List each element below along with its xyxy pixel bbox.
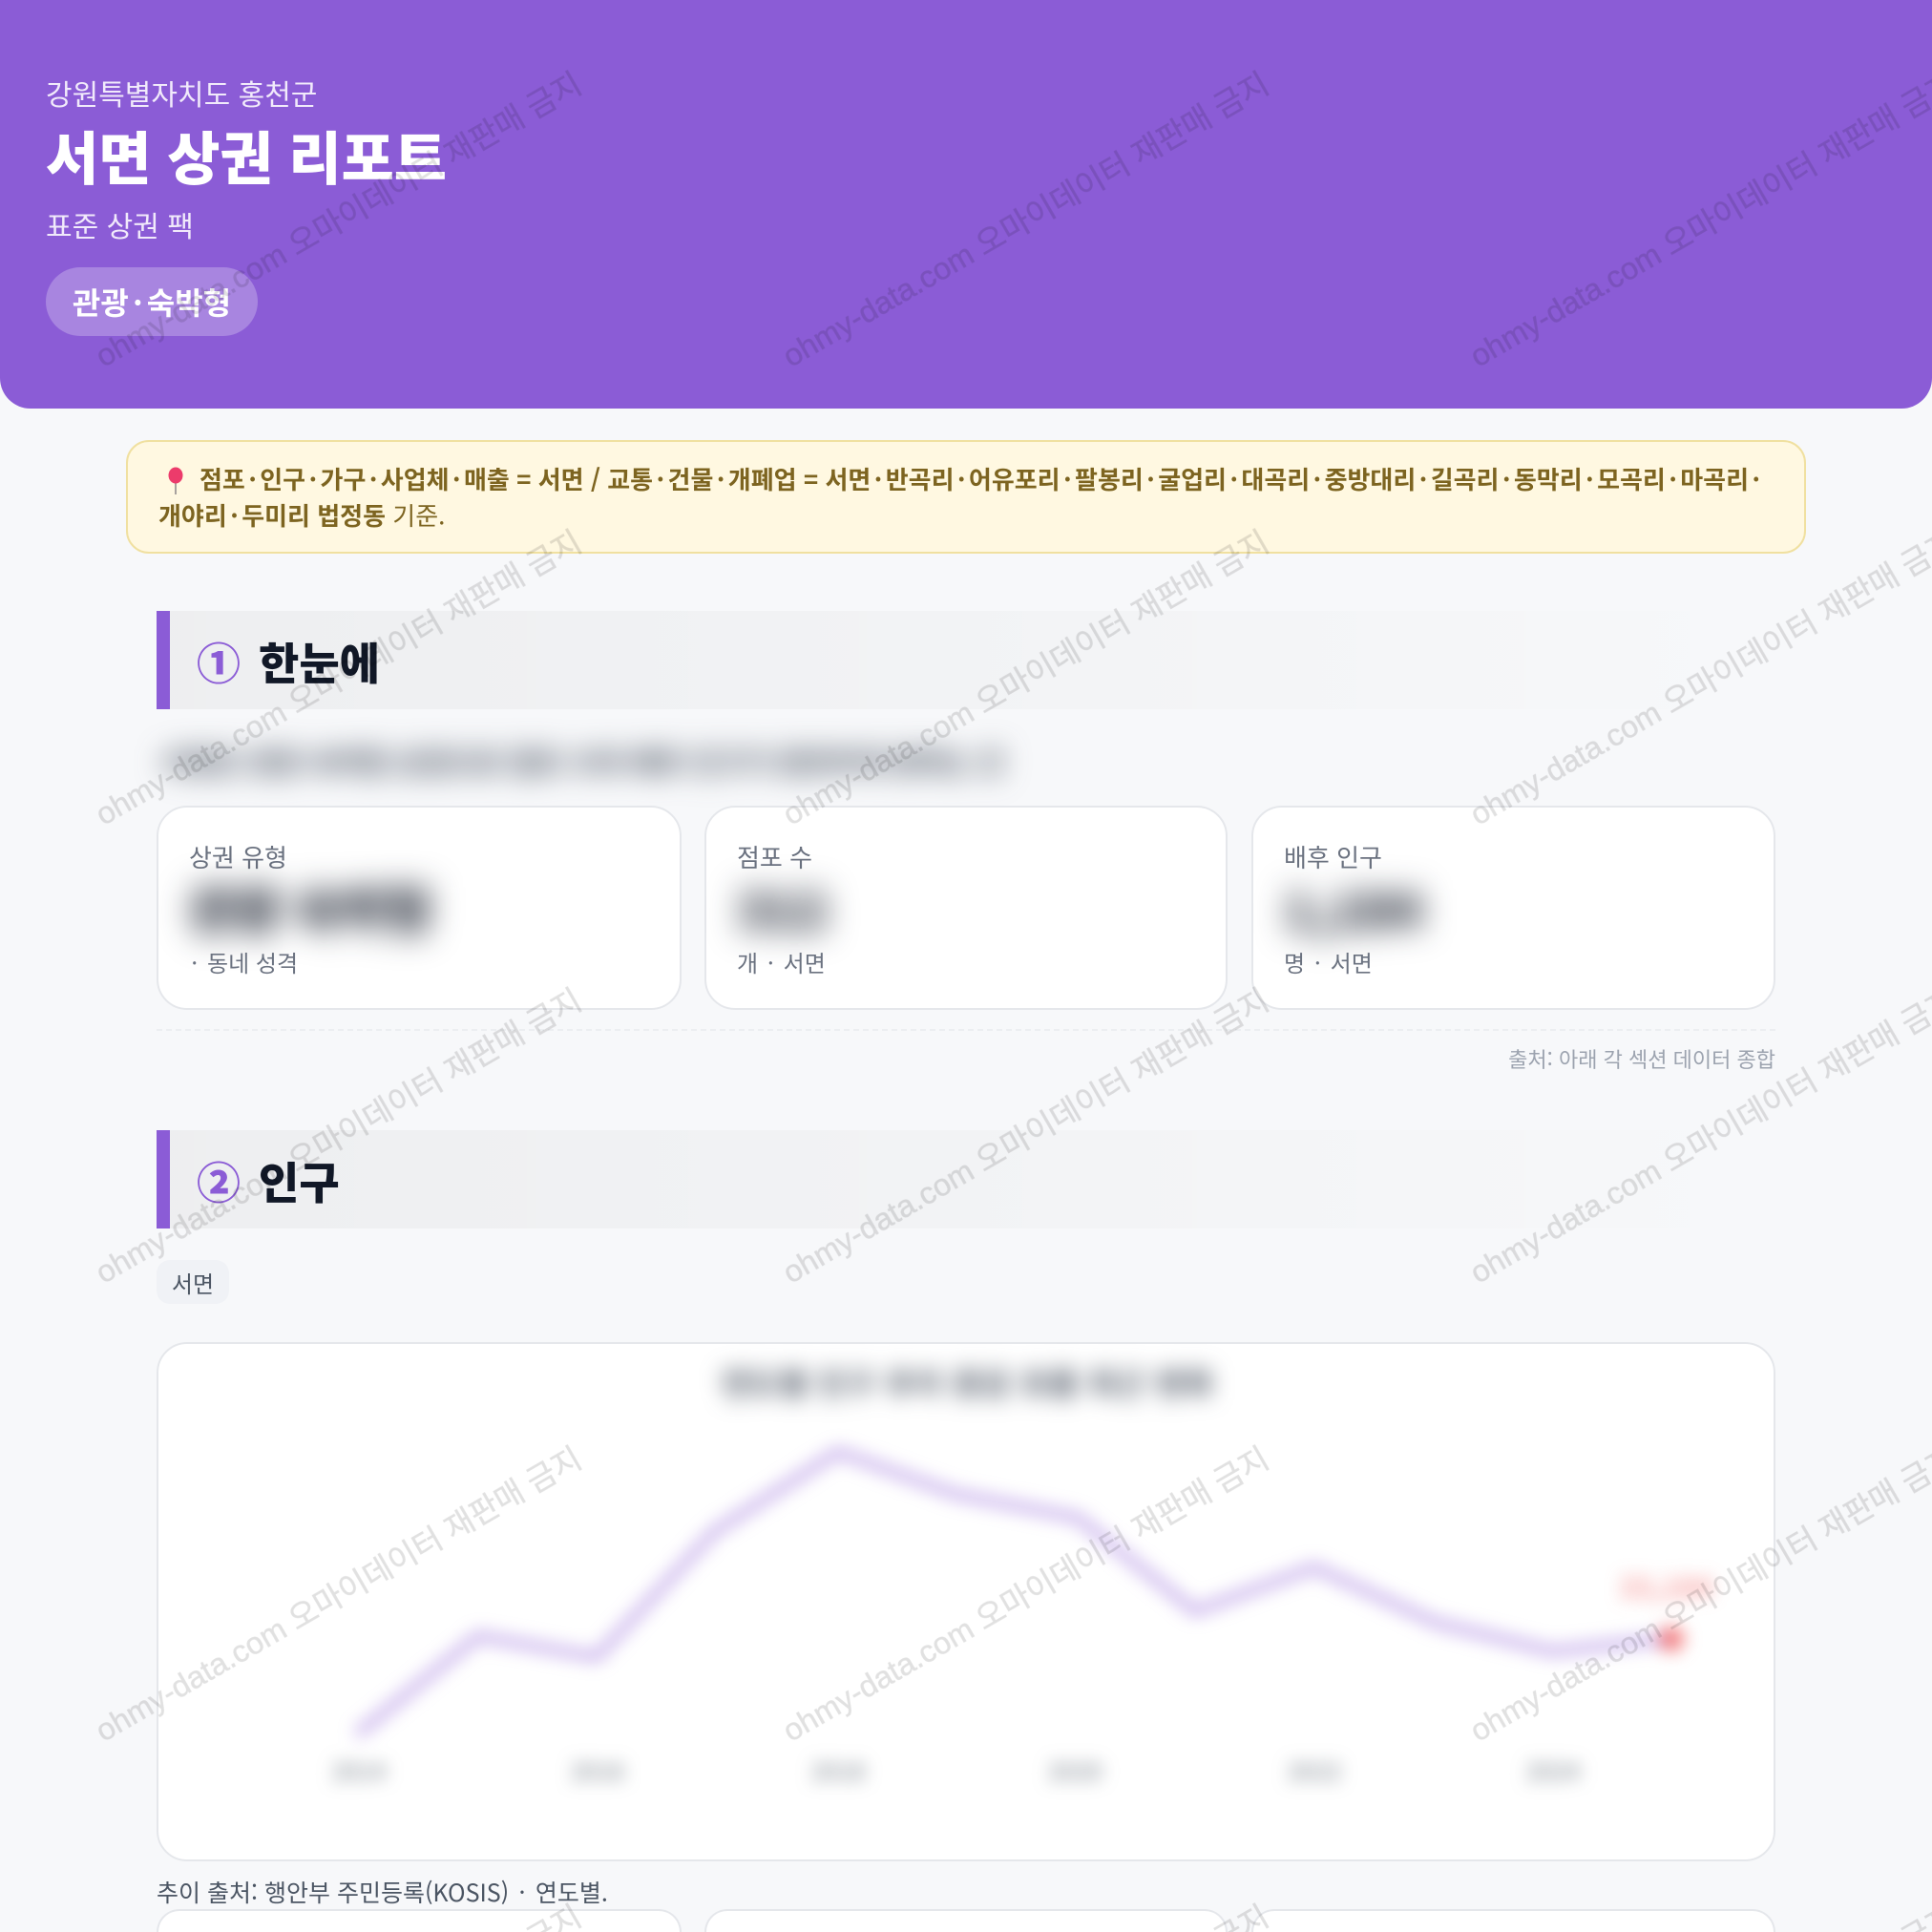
line chart: 2024 xyxy=(1525,1754,1581,1788)
notice text: 개야리·두미리 법정동 기준. xyxy=(158,497,445,533)
line chart: 2022 xyxy=(1287,1754,1342,1788)
card: population xyxy=(1251,806,1775,1010)
section heading: at a glance xyxy=(157,611,1774,709)
line chart: 2018 xyxy=(810,1754,866,1788)
section number 2: ② xyxy=(197,1149,241,1212)
region chip xyxy=(157,1260,229,1304)
chart source note: 추이 출처: 행안부 주민등록(KOSIS) · 연도별. xyxy=(157,1875,608,1909)
line chart: 2016 xyxy=(570,1754,625,1788)
lower stat card 3 xyxy=(1251,1909,1775,1932)
note: 개 · 서면 xyxy=(737,945,826,978)
line chart xyxy=(327,1439,1718,1789)
note: · 동네 성격 xyxy=(191,945,298,978)
watermark overlay: ohmy-data.com 오마이데이터 재판매 금지 xyxy=(776,524,1274,831)
line chart: 2020 xyxy=(1047,1754,1102,1788)
notice text xyxy=(158,461,1760,533)
lower stat card 1 xyxy=(157,1909,682,1932)
blurred value: 1,184 xyxy=(1284,872,1422,943)
section heading: population xyxy=(157,1130,1774,1228)
notice text: 점포·인구·가구·사업체·매출 = 서면 / 교통·건물·개폐업 = 서면·반곡리·어유포리·팔봉리·굴업리·대곡리·중방대리·길곡리·동막리·모곡리·마곡리· xyxy=(200,461,1760,496)
chart card xyxy=(157,1342,1775,1861)
type pill: 관광·숙박형 xyxy=(73,280,231,324)
card: store count xyxy=(704,806,1228,1010)
blurred value: 312 xyxy=(737,872,828,943)
note: 명 · 서면 xyxy=(1284,945,1373,978)
type pill xyxy=(46,267,258,336)
watermark overlay: ohmy-data.com 오마이데이터 재판매 금지 xyxy=(89,66,587,373)
watermark overlay: ohmy-data.com 오마이데이터 재판매 금지 xyxy=(776,66,1274,373)
report title: 서면 상권 리포트 xyxy=(46,114,447,197)
line chart: 2014 xyxy=(331,1754,387,1788)
blurred summary sentence: 서면은 관광 숙박형 상권으로 점포 수와 배후 인구가 완만하게 변하는 곳 xyxy=(160,740,1004,782)
pack subtitle: 표준 상권 팩 xyxy=(46,203,194,245)
label: 상권 유형 xyxy=(189,839,287,874)
watermark overlay: ohmy-data.com 오마이데이터 재판매 금지 xyxy=(776,1440,1274,1748)
section title: 인구 xyxy=(259,1149,340,1212)
watermark overlay: ohmy-data.com 오마이데이터 재판매 금지 xyxy=(89,1440,587,1748)
watermark overlay: ohmy-data.com 오마이데이터 재판매 금지 xyxy=(89,982,587,1290)
lower stat card 2 xyxy=(704,1909,1228,1932)
source note: 출처: 아래 각 섹션 데이터 종합 xyxy=(1508,1043,1775,1074)
label: 점포 수 xyxy=(737,839,812,874)
label: 배후 인구 xyxy=(1284,839,1382,874)
watermark overlay: ohmy-data.com 오마이데이터 재판매 금지 xyxy=(776,982,1274,1290)
section title: 한눈에 xyxy=(259,630,380,693)
icon: pin xyxy=(168,468,183,494)
region label: 강원특별자치도 홍천군 xyxy=(46,72,317,114)
watermark overlay: ohmy-data.com 오마이데이터 재판매 금지 xyxy=(89,524,587,831)
line chart: 33,184 xyxy=(1619,1564,1712,1606)
blurred value: 관광 숙박형 xyxy=(189,872,431,943)
region chip: 서면 xyxy=(172,1266,214,1299)
card: commercial type xyxy=(157,806,682,1010)
section number 1: ① xyxy=(197,630,241,693)
scope notice banner xyxy=(126,440,1806,554)
hero header xyxy=(0,0,1932,409)
blurred chart title: 연도별 인구 추이 증감 흐름 최근 변화 xyxy=(722,1360,1214,1403)
